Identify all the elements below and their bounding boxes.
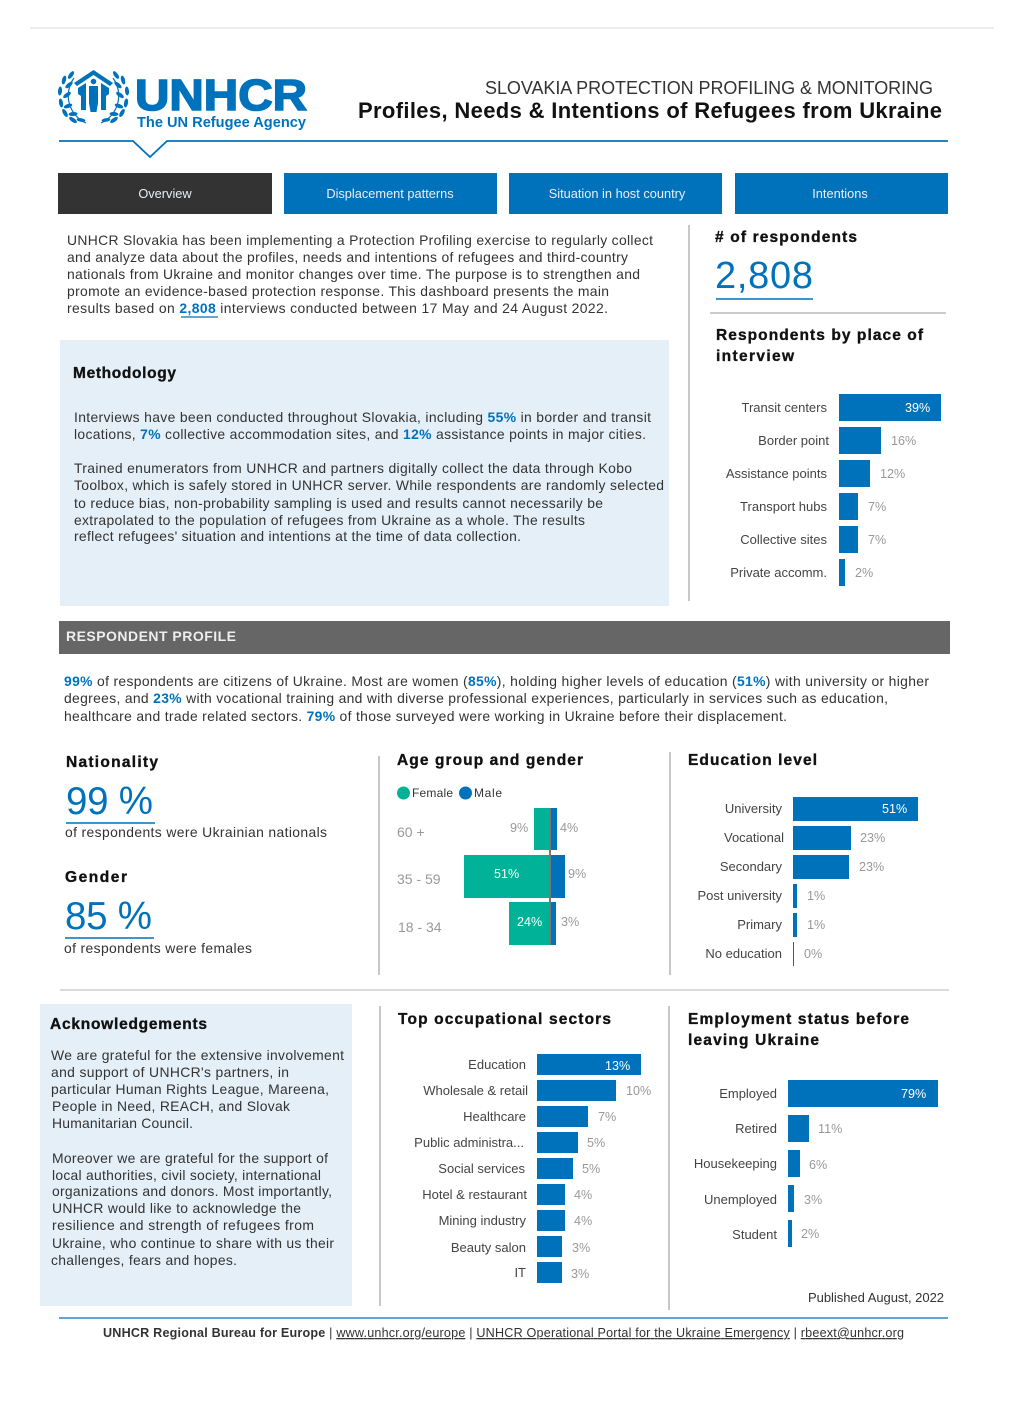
acknowledgements text: and support of UNHCR's partners, in bbox=[51, 1064, 289, 1080]
header rule with pointer bbox=[59, 141, 948, 157]
tab: displacement patterns: Displacement patterns bbox=[326, 186, 454, 201]
main title: Profiles, Needs & Intentions of Refugees from Ukraine bbox=[358, 98, 942, 123]
bar chart: occupational sectors: 10% bbox=[626, 1084, 651, 1098]
acknowledgements text bbox=[51, 1047, 344, 1268]
bar chart: occupational sectors: Hotel & restaurant bbox=[422, 1187, 527, 1202]
big number: 99 % bbox=[66, 780, 153, 823]
bar chart: education: 51% bbox=[882, 802, 907, 816]
bar chart: place of interview: 16% bbox=[891, 434, 916, 448]
bar chart: place of interview: Transit centers bbox=[742, 400, 827, 415]
acknowledgements text: Ukraine, who continue to share with us their bbox=[52, 1235, 334, 1251]
big number: 2,808 bbox=[715, 255, 813, 297]
acknowledgements text: resilience and strength of refugees from bbox=[52, 1217, 314, 1233]
bar chart: employment status: 3% bbox=[804, 1193, 822, 1207]
caption: of respondents were Ukrainian nationals bbox=[65, 824, 327, 840]
bar chart: employment status: 79% bbox=[901, 1087, 926, 1101]
intro text bbox=[67, 232, 653, 317]
acknowledgements text: local authorities, civil society, international bbox=[52, 1167, 321, 1183]
intro text: results based on 2,808 interviews conducted between 17 May and 24 August 2022. bbox=[67, 300, 608, 316]
profile summary text: 99% of respondents are citizens of Ukraine. Most are women (85%), holding higher levels of education (51%) with university or higher bbox=[64, 673, 929, 689]
pyramid chart: 4% bbox=[560, 821, 578, 835]
tab: situation in host country: Situation in host country bbox=[549, 186, 686, 201]
bar chart: education: Secondary bbox=[720, 859, 782, 874]
acknowledgements text: organizations and donors. Most importantly, bbox=[52, 1183, 332, 1199]
bar chart: occupational sectors: 7% bbox=[598, 1110, 616, 1124]
bar chart: place of interview: 39% bbox=[905, 401, 930, 415]
heading: Top occupational sectors bbox=[398, 1011, 611, 1028]
bar chart: place of interview: 2% bbox=[855, 566, 873, 580]
footer links: UNHCR Regional Bureau for Europe | www.unhcr.org/europe | UNHCR Operational Portal for the Ukraine Emergency | rbeext@unhcr.org bbox=[103, 1326, 904, 1340]
methodology text: locations, 7% collective accommodation sites, and 12% assistance points in major cities. bbox=[74, 426, 646, 442]
tab: overview: Overview bbox=[138, 186, 192, 201]
bar chart: place of interview: 7% bbox=[868, 533, 886, 547]
pyramid chart: 60 + bbox=[397, 824, 425, 840]
methodology text: reflect refugees' situation and intentions at the time of data collection. bbox=[74, 528, 521, 544]
methodology text: Trained enumerators from UNHCR and partners digitally collect the data through Kobo bbox=[74, 460, 632, 476]
bar chart: occupational sectors: Education bbox=[468, 1057, 526, 1072]
bar chart: employment status: 6% bbox=[809, 1158, 827, 1172]
caption: of respondents were females bbox=[64, 940, 252, 956]
panel: nationality bbox=[65, 754, 327, 840]
bar chart: education: 23% bbox=[860, 831, 885, 845]
profile summary text: degrees, and 23% with vocational training and with diverse professional experiences, particularly in services such as education, bbox=[64, 690, 888, 706]
bar chart: employment status bbox=[694, 1080, 938, 1247]
heading: respondents by place of interview: interview bbox=[716, 348, 795, 365]
bar chart: education: No education bbox=[705, 946, 782, 961]
methodology text: extrapolated to the population of refugees from Ukraine as a whole. The results bbox=[74, 512, 585, 528]
title block bbox=[358, 78, 942, 123]
bar chart: place of interview: 7% bbox=[868, 500, 886, 514]
bar chart: occupational sectors: 3% bbox=[571, 1267, 589, 1281]
bar chart: employment status: Housekeeping bbox=[694, 1156, 777, 1171]
logo tagline: The UN Refugee Agency bbox=[137, 114, 307, 131]
supertitle: SLOVAKIA PROTECTION PROFILING & MONITORING bbox=[485, 78, 933, 98]
bar chart: occupational sectors bbox=[414, 1054, 651, 1283]
acknowledgements text: particular Human Rights League, Mareena, bbox=[51, 1081, 329, 1097]
bar chart: education: Vocational bbox=[724, 830, 784, 845]
bar chart: education: Post university bbox=[697, 888, 782, 903]
heading: Nationality bbox=[66, 754, 158, 771]
bar chart: occupational sectors: 13% bbox=[605, 1059, 630, 1073]
bar chart: occupational sectors: Social services bbox=[438, 1161, 525, 1176]
bar chart: occupational sectors: 5% bbox=[582, 1162, 600, 1176]
heading: respondents by place of interview: Respondents by place of bbox=[716, 327, 924, 344]
panel: age group and gender bbox=[397, 752, 586, 945]
methodology text: Toolbox, which is safely stored in UNHCR server. While respondents are randomly selected bbox=[74, 477, 664, 493]
bar chart: education: 23% bbox=[859, 860, 884, 874]
heading: leaving Ukraine bbox=[688, 1032, 819, 1049]
pyramid chart: 9% bbox=[568, 867, 586, 881]
bar chart: employment status: 11% bbox=[818, 1122, 842, 1136]
bar chart: employment status: Retired bbox=[735, 1121, 777, 1136]
bar chart: place of interview: Transport hubs bbox=[740, 499, 827, 514]
bar chart: place of interview: Collective sites bbox=[740, 532, 827, 547]
bar chart: occupational sectors: 5% bbox=[587, 1136, 605, 1150]
heading: Methodology bbox=[73, 365, 176, 382]
tab: intentions: Intentions bbox=[812, 186, 868, 201]
bar chart: occupational sectors: Mining industry bbox=[439, 1213, 526, 1228]
bar chart: employment status: 2% bbox=[801, 1227, 819, 1241]
bar chart: education: 1% bbox=[807, 918, 825, 932]
acknowledgements text: People in Need, REACH, and Slovak bbox=[52, 1098, 290, 1114]
methodology text: to reduce bias, non-probability sampling is used and results cannot necessarily be bbox=[74, 495, 603, 511]
methodology text bbox=[74, 409, 664, 544]
bar chart: education: Primary bbox=[737, 917, 782, 932]
panel: education level bbox=[688, 752, 918, 966]
section banner: respondent profile bbox=[59, 621, 950, 654]
pyramid chart: 51% bbox=[494, 867, 519, 881]
panel: methodology bbox=[60, 340, 669, 606]
legend: Female bbox=[412, 786, 453, 800]
bar chart: place of interview bbox=[726, 394, 941, 586]
heading: Employment status before bbox=[688, 1011, 909, 1028]
heading: Education level bbox=[688, 752, 817, 769]
bar chart: occupational sectors: 4% bbox=[574, 1188, 592, 1202]
bar chart: education bbox=[697, 797, 918, 966]
heading: Age group and gender bbox=[397, 752, 583, 769]
acknowledgements text: Humanitarian Council. bbox=[52, 1115, 193, 1131]
bar chart: education: 1% bbox=[807, 889, 825, 903]
panel: employment status bbox=[688, 1011, 938, 1247]
panel: top occupational sectors bbox=[398, 1011, 651, 1283]
bar chart: education: 0% bbox=[804, 947, 822, 961]
bar chart: occupational sectors: Beauty salon bbox=[451, 1240, 526, 1255]
logo wordmark: UNHCR bbox=[135, 71, 307, 120]
bar chart: occupational sectors: IT bbox=[514, 1265, 526, 1280]
bar chart: place of interview: 12% bbox=[880, 467, 905, 481]
navigation tabs bbox=[58, 173, 948, 214]
icon: UNHCR emblem bbox=[58, 70, 129, 124]
tab: situation in host country bbox=[509, 173, 722, 214]
bar chart: occupational sectors: 3% bbox=[572, 1241, 590, 1255]
intro text: promote an evidence-based protection response. This dashboard presents the main bbox=[67, 283, 609, 299]
panel: gender bbox=[64, 869, 252, 956]
heading: # of respondents bbox=[715, 229, 857, 246]
legend bbox=[397, 786, 502, 800]
tab: intentions bbox=[735, 173, 948, 214]
bar chart: occupational sectors: Public administra... bbox=[414, 1135, 524, 1150]
heading: respondents by place of interview bbox=[716, 327, 924, 365]
acknowledgements text: UNHCR would like to acknowledge the bbox=[52, 1200, 301, 1216]
section banner: respondent profile: RESPONDENT PROFILE bbox=[66, 628, 236, 644]
pyramid chart: 35 - 59 bbox=[397, 871, 441, 887]
tab: overview bbox=[58, 173, 272, 214]
pyramid chart: 9% bbox=[510, 821, 528, 835]
pyramid chart bbox=[397, 808, 586, 945]
pyramid chart: 3% bbox=[561, 915, 579, 929]
panel: acknowledgements bbox=[40, 1004, 352, 1306]
logo: UNHCR bbox=[58, 70, 307, 131]
bar chart: occupational sectors: 4% bbox=[574, 1214, 592, 1228]
profile summary text: healthcare and trade related sectors. 79% of those surveyed were working in Ukraine before their displacement. bbox=[64, 708, 787, 724]
intro text: UNHCR Slovakia has been implementing a Protection Profiling exercise to regularly collect bbox=[67, 232, 653, 248]
heading: Gender bbox=[65, 869, 127, 886]
bar chart: occupational sectors: Wholesale & retail bbox=[423, 1083, 528, 1098]
pyramid chart: 18 - 34 bbox=[398, 919, 442, 935]
bar chart: place of interview: Private accomm. bbox=[730, 565, 827, 580]
heading bbox=[688, 1011, 909, 1049]
methodology text: Interviews have been conducted throughout Slovakia, including 55% in border and transit bbox=[74, 409, 651, 425]
bar chart: education: University bbox=[725, 801, 782, 816]
legend: Male bbox=[474, 786, 502, 800]
bar chart: occupational sectors: Healthcare bbox=[463, 1109, 526, 1124]
tab: displacement patterns bbox=[284, 173, 497, 214]
panel: respondents count bbox=[715, 229, 857, 299]
acknowledgements text: We are grateful for the extensive involvement bbox=[51, 1047, 344, 1063]
heading: Acknowledgements bbox=[50, 1016, 207, 1033]
published date: Published August, 2022 bbox=[808, 1290, 944, 1305]
bar chart: place of interview: Border point bbox=[758, 433, 829, 448]
intro text: nationals from Ukraine and monitor changes over time. The purpose is to strengthen and bbox=[67, 266, 640, 282]
intro text: and analyze data about the profiles, needs and intentions of refugees and third-country bbox=[67, 249, 628, 265]
big number: 85 % bbox=[65, 895, 152, 938]
bar chart: employment status: Unemployed bbox=[704, 1192, 777, 1207]
pyramid chart: 24% bbox=[517, 915, 542, 929]
acknowledgements text: Moreover we are grateful for the support of bbox=[52, 1150, 328, 1166]
profile summary text bbox=[64, 673, 929, 724]
bar chart: employment status: Employed bbox=[719, 1086, 777, 1101]
bar chart: employment status: Student bbox=[732, 1227, 777, 1242]
acknowledgements text: challenges, fears and hopes. bbox=[51, 1252, 237, 1268]
bar chart: place of interview: Assistance points bbox=[726, 466, 827, 481]
